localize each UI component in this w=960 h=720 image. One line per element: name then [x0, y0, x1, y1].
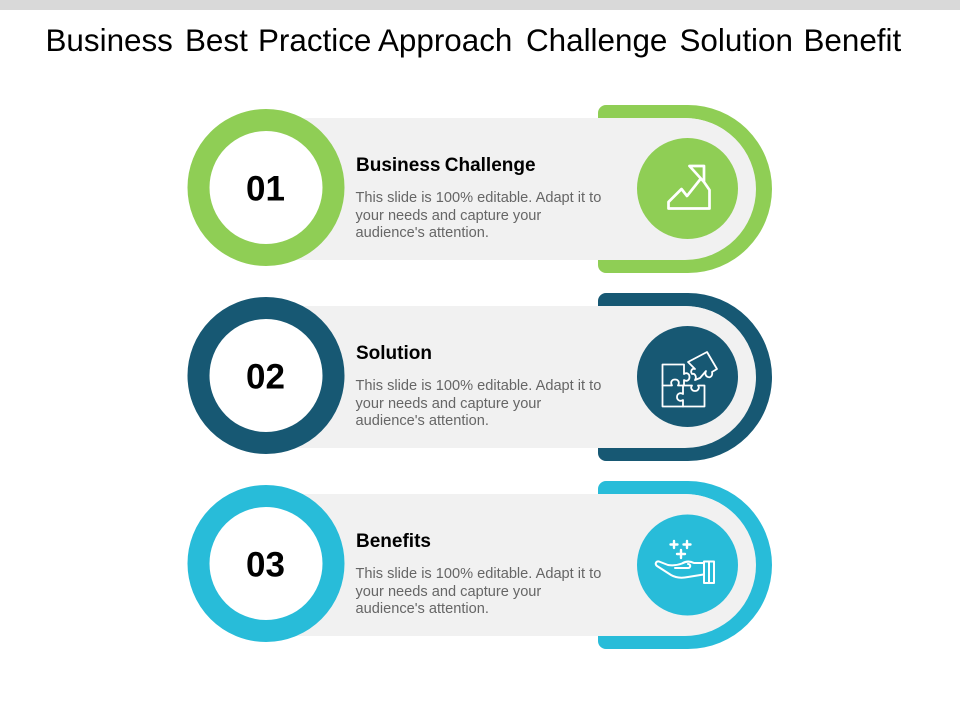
number: 03: [246, 546, 285, 584]
title: Practice: [258, 23, 371, 58]
body text: This slide is 100% editable. Adapt it to: [356, 190, 601, 206]
outer bracket: [598, 105, 772, 273]
number ring: [198, 120, 334, 255]
card background: [266, 118, 756, 260]
title: Approach: [378, 23, 512, 58]
heading: Business Challenge: [356, 155, 536, 176]
icon: puzzle: [637, 326, 738, 427]
body text: your needs and capture your: [356, 208, 541, 224]
body text: This slide is 100% editable. Adapt it to: [356, 566, 601, 582]
title: Business: [46, 23, 173, 58]
body text: This slide is 100% editable. Adapt it to: [356, 378, 601, 394]
body text: audience's attention.: [356, 225, 489, 241]
outer bracket: [598, 293, 772, 461]
body text: your needs and capture your: [356, 584, 541, 600]
panel: solution: [198, 293, 772, 461]
title: Solution: [680, 23, 793, 58]
number: 01: [246, 170, 285, 208]
panel: business challenge: [198, 105, 772, 273]
panel: benefits: [198, 481, 772, 649]
card background: [266, 494, 756, 636]
icon: hand with sparkles: [637, 514, 738, 616]
top bar: [0, 0, 960, 10]
body text: your needs and capture your: [356, 396, 541, 412]
body text: audience's attention.: [356, 601, 489, 617]
number: 02: [246, 358, 285, 396]
number ring: [198, 496, 334, 631]
card background: [266, 306, 756, 448]
title: Benefit: [804, 23, 902, 58]
body text: audience's attention.: [356, 413, 489, 429]
title: Challenge: [526, 23, 667, 58]
heading: Benefits: [356, 531, 431, 552]
icon: mountain chart: [637, 138, 738, 239]
outer bracket: [598, 481, 772, 649]
title: Best: [185, 23, 248, 58]
number ring: [198, 308, 334, 443]
heading: Solution: [356, 343, 432, 364]
